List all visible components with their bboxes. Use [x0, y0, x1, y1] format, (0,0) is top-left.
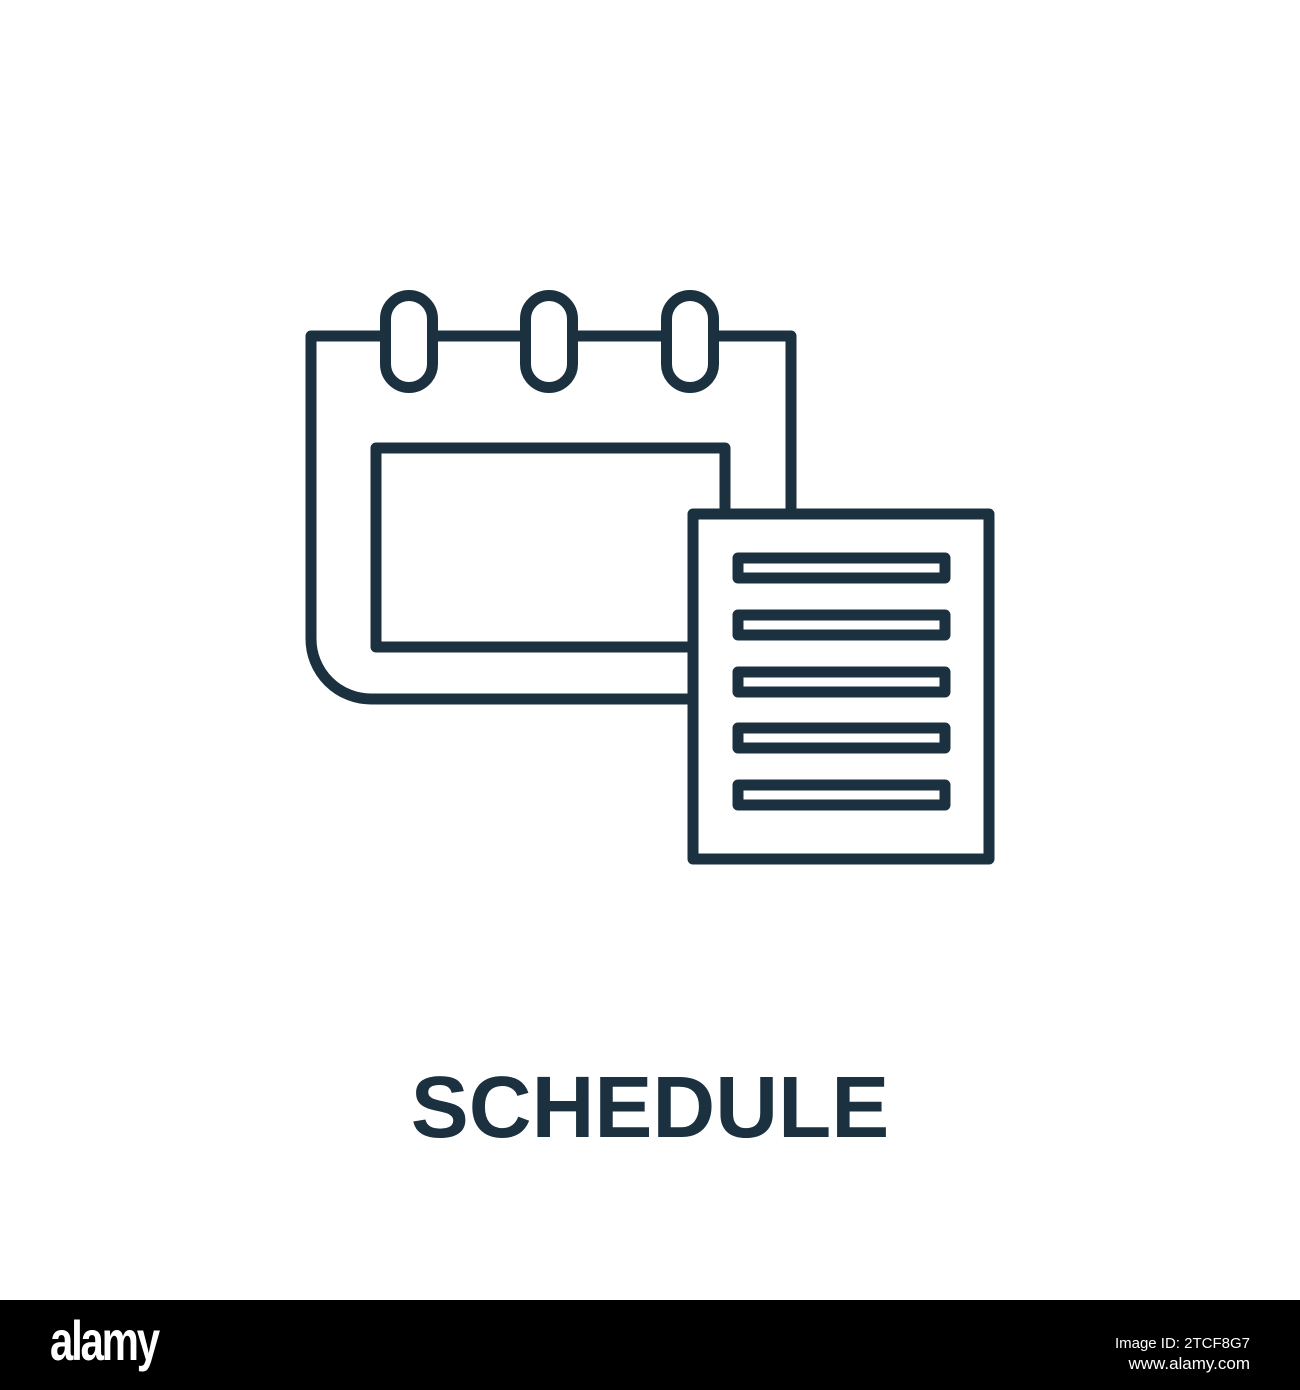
footer image id: Image ID: 2TCF8G7	[1115, 1335, 1250, 1352]
calendar body	[311, 336, 791, 699]
footer image id	[1115, 1335, 1250, 1373]
calendar rings	[386, 296, 714, 388]
footer logo: alamy	[50, 1309, 158, 1372]
footer image id: www.alamy.com	[1128, 1354, 1250, 1373]
footer bar	[0, 1300, 1300, 1390]
title: SCHEDULE: SCHEDULE	[411, 1059, 889, 1156]
document with lines	[693, 514, 989, 859]
